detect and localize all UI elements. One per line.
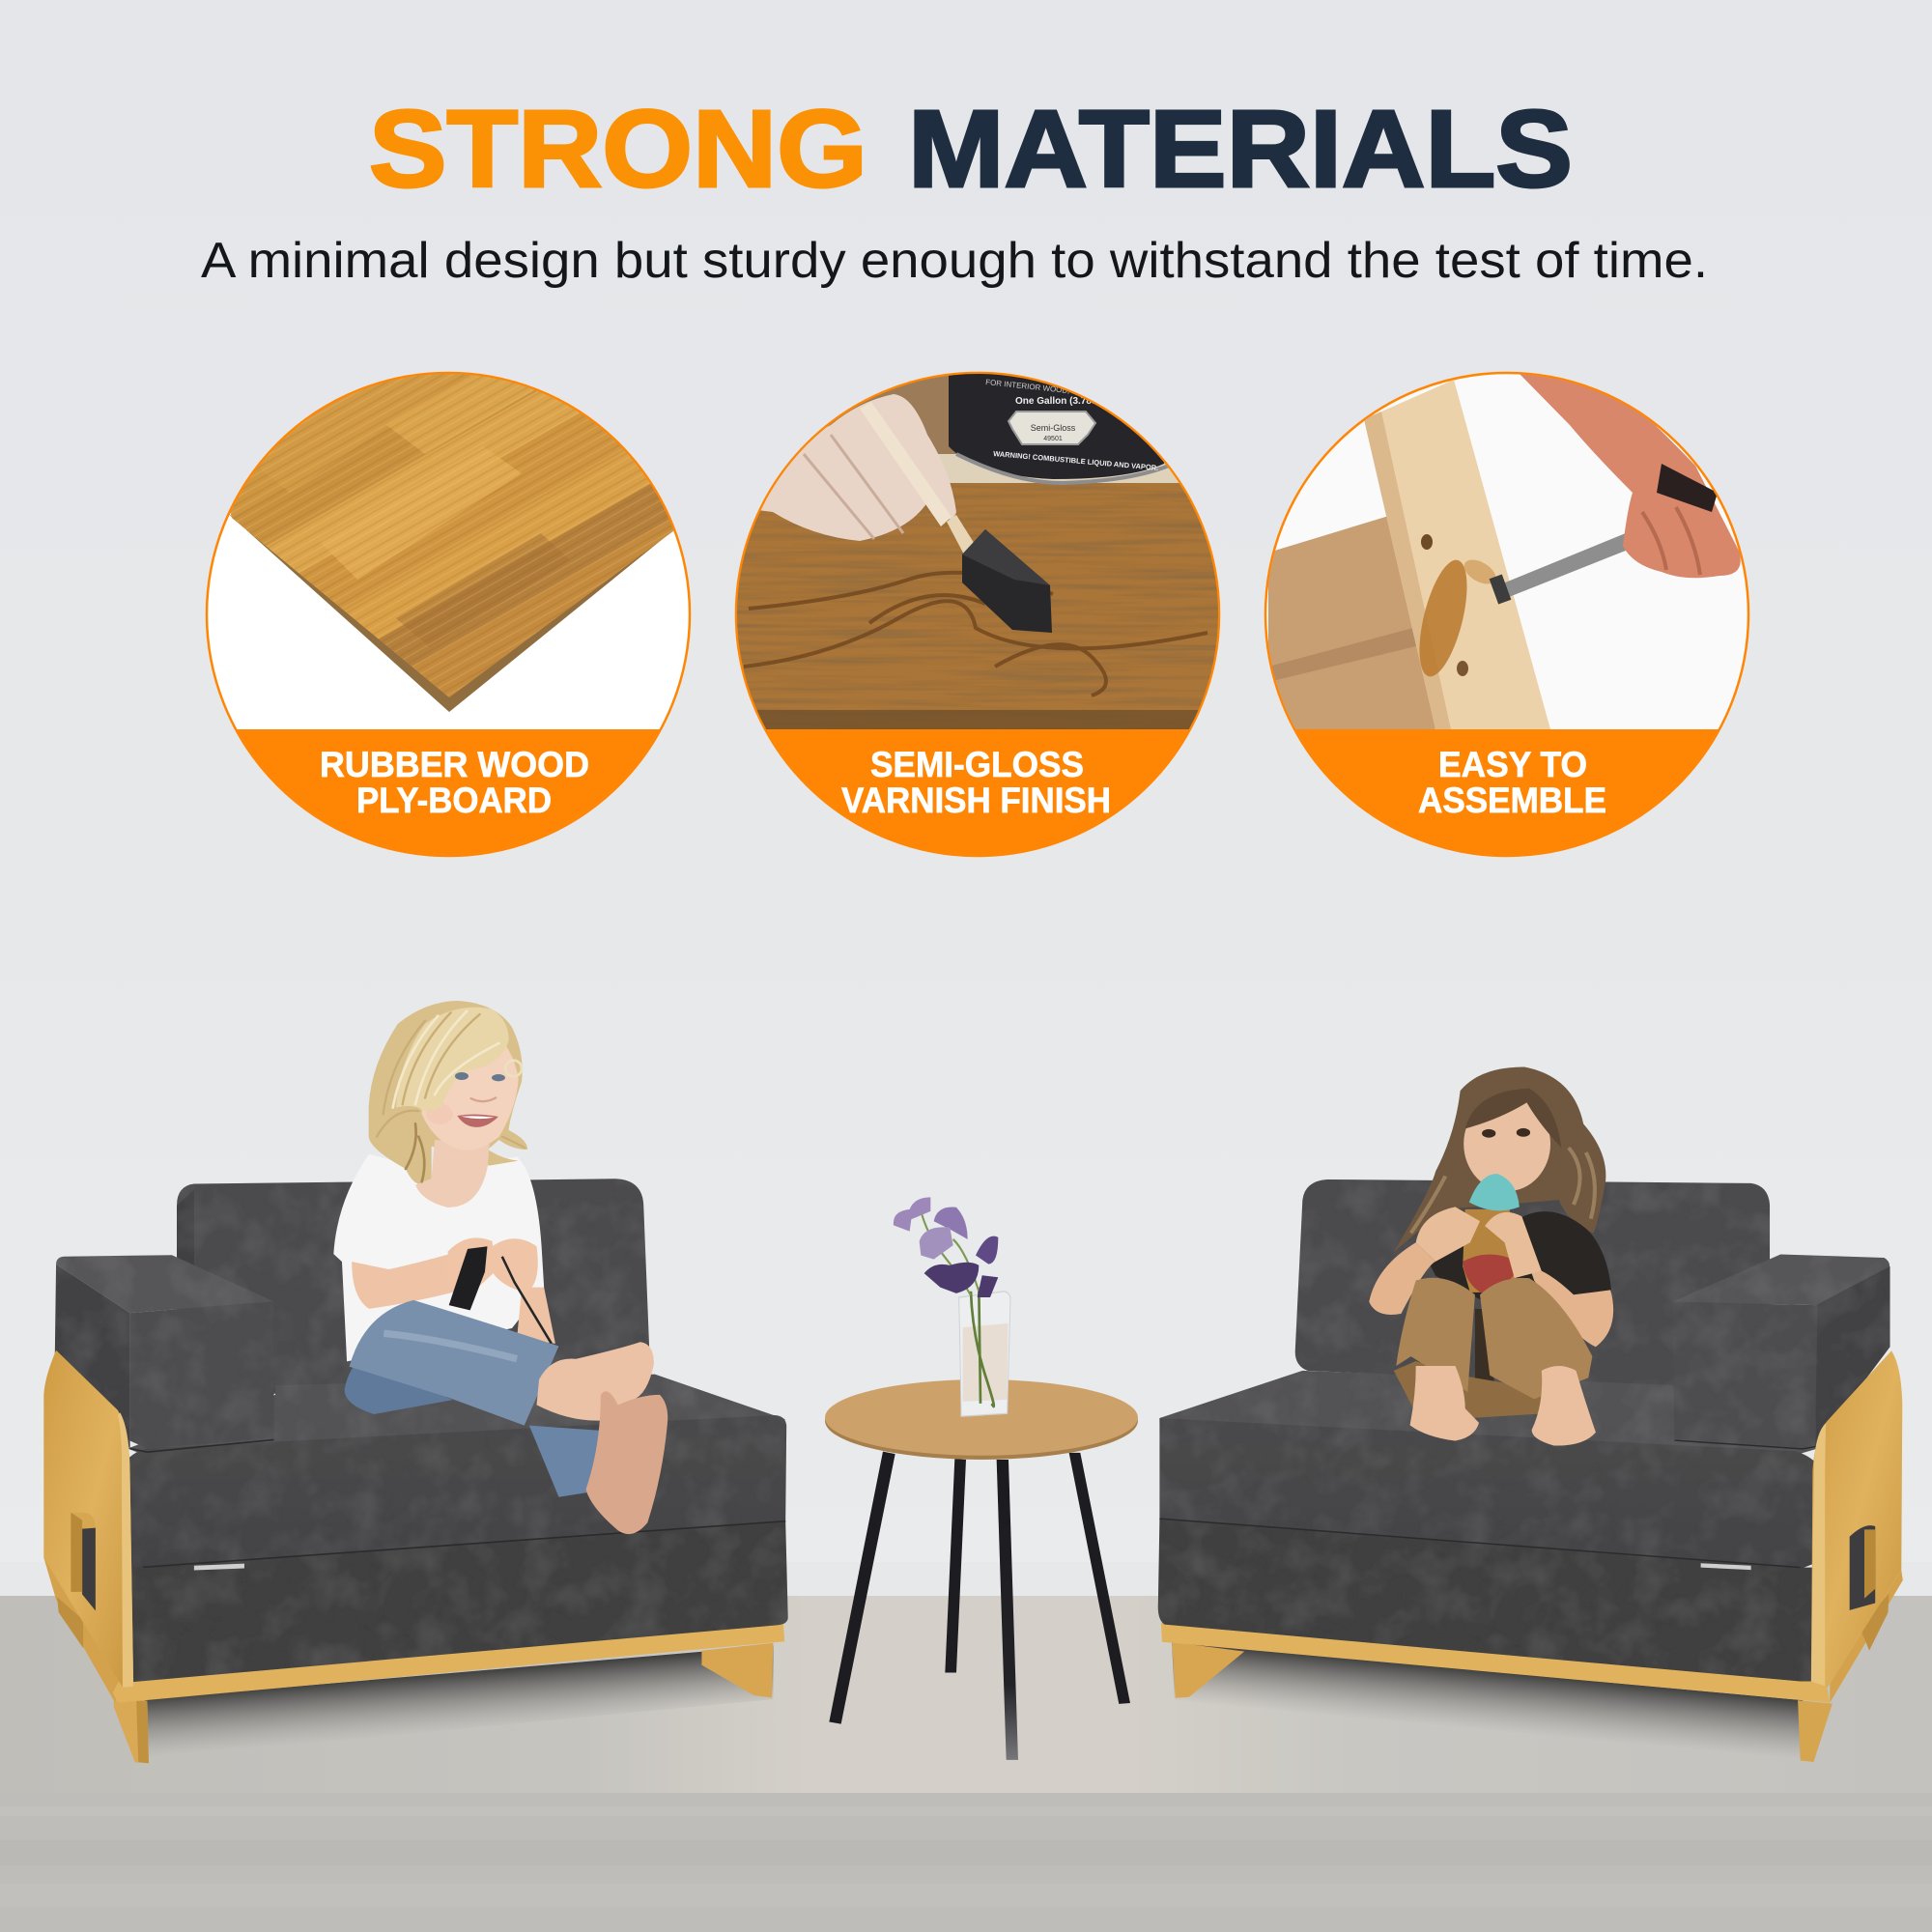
vase: [959, 1288, 1010, 1416]
varnish can: Semi-Gloss: [1031, 423, 1076, 433]
sole of foot: [586, 1391, 668, 1534]
varnish photo: [734, 367, 1227, 732]
orange label band: [767, 729, 1188, 855]
arms: [1369, 1242, 1613, 1347]
cushions: [55, 1179, 788, 1683]
bottle: [1463, 1174, 1520, 1294]
table top: [825, 1379, 1138, 1460]
fringe: [396, 1008, 509, 1111]
label text: [1418, 745, 1606, 820]
label text: ASSEMBLE: [1418, 781, 1606, 820]
label text: PLY-BOARD: [356, 781, 552, 820]
label text: SEMI-GLOSS: [870, 745, 1084, 784]
hair: [1394, 1067, 1605, 1252]
label text: EASY TO: [1438, 745, 1587, 784]
panel: rubber wood ply-board: [205, 371, 692, 858]
wooden base: [43, 1557, 784, 1763]
right sofa with child: [1158, 1067, 1903, 1762]
panel: easy to assemble: [1256, 367, 1768, 865]
shirt: [1426, 1211, 1611, 1347]
title: MATERIALS: [908, 88, 1573, 210]
upper foot: [537, 1342, 654, 1421]
arms and hands: [352, 1237, 555, 1344]
child: brown haired toddler with bottle: [1369, 1067, 1613, 1446]
wood board photo: [230, 374, 674, 712]
panel: semi-gloss varnish finish: [724, 367, 1236, 865]
varnish can: FOR INTERIOR WOOD, METAL: [985, 378, 1097, 398]
label text: [841, 745, 1111, 820]
orange label band: [1296, 729, 1718, 855]
title: [369, 88, 1573, 210]
varnish can: 49501: [1043, 436, 1063, 442]
face: [1463, 1096, 1550, 1191]
hair strands: [377, 1011, 525, 1181]
hands: [1416, 1207, 1542, 1278]
fringe: [1465, 1089, 1561, 1148]
subtitle: A minimal design but sturdy enough to withstand the test of time.: [201, 233, 1708, 289]
back hair: [369, 1001, 527, 1184]
title: STRONG: [369, 88, 867, 210]
eyes, nose and mouth: [455, 1072, 505, 1127]
flowers: [894, 1197, 998, 1297]
jeans: [345, 1300, 603, 1497]
side table with vase: [825, 1197, 1138, 1760]
table legs: [829, 1452, 1130, 1760]
screwdriver: [1505, 533, 1626, 597]
floor shadow: [1172, 1642, 1803, 1760]
hand and brush: [734, 394, 1052, 633]
neck: [415, 1140, 490, 1208]
hand: [1519, 367, 1741, 578]
assembly photo: [1268, 367, 1741, 729]
varnish can: WARNING! COMBUSTIBLE LIQUID AND VAPOR.: [993, 449, 1159, 472]
shirt: [333, 1154, 544, 1361]
wooden side panel: [1811, 1350, 1902, 1688]
label text: VARNISH FINISH: [841, 781, 1111, 820]
label text: [320, 745, 589, 820]
wooden base: [1161, 1570, 1903, 1762]
left sofa with child: [43, 1154, 788, 1763]
varnish can: [949, 374, 1169, 485]
trousers: [1394, 1278, 1592, 1418]
face: [422, 1027, 519, 1151]
floor shadow: [145, 1645, 773, 1758]
curl: [505, 1061, 522, 1076]
feet: [1410, 1366, 1596, 1446]
orange label band: [238, 729, 659, 855]
varnish can: One Gallon (3.785 L): [1015, 396, 1109, 407]
blonde boy head: [369, 1001, 527, 1208]
wooden side panel: [43, 1350, 133, 1688]
label text: RUBBER WOOD: [320, 745, 589, 784]
cushions: [1158, 1179, 1890, 1682]
eyes: [1482, 1128, 1530, 1138]
child: blonde boy body: [333, 1154, 668, 1534]
